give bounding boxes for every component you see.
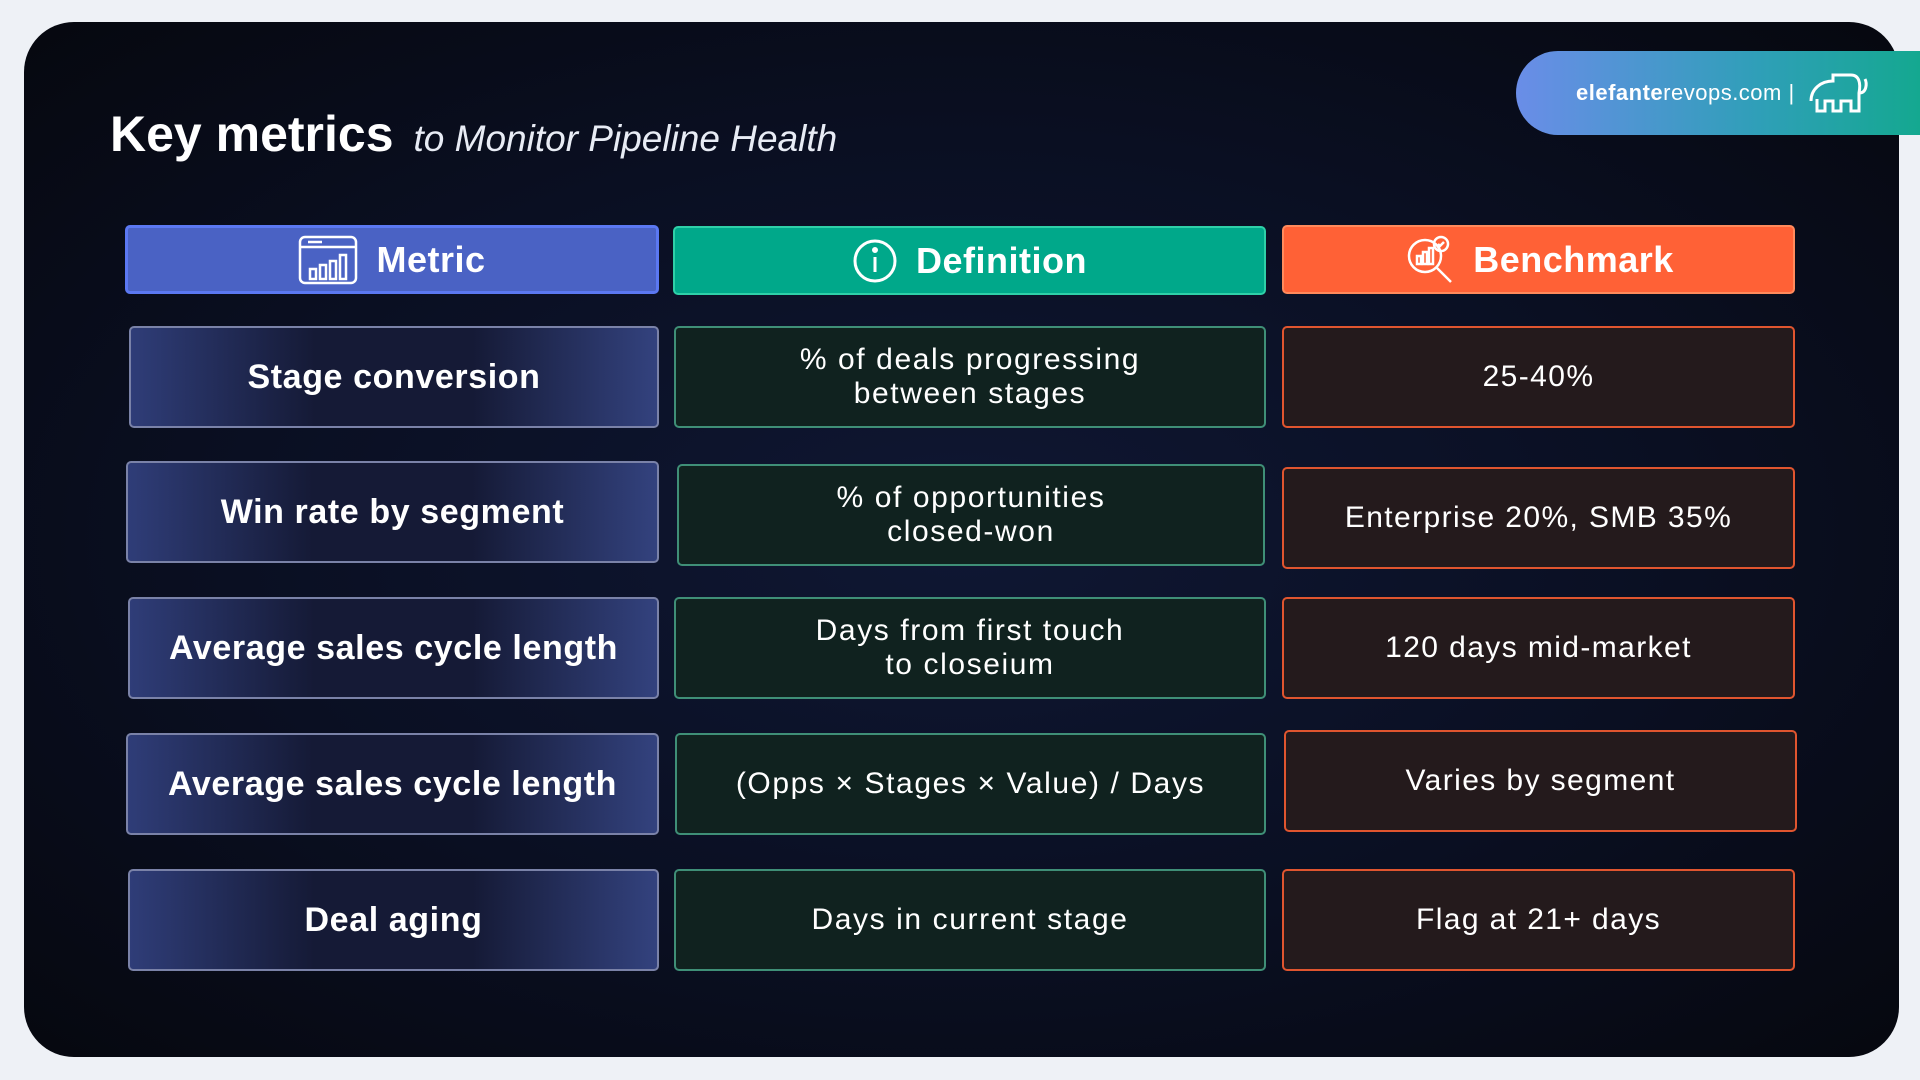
row 1 definition: % of deals progressing (800, 343, 1140, 376)
row 4 definition: (Opps × Stages × Value) / Days (736, 767, 1205, 800)
row 2 definition: % of opportunities (837, 481, 1105, 514)
row 2 metric: Win rate by segment (221, 492, 564, 530)
row 4 benchmark: Varies by segment (1405, 764, 1676, 797)
row 3 benchmark (1282, 597, 1795, 699)
row 2 definition: closed-won (887, 515, 1055, 548)
row 5 definition (674, 869, 1266, 971)
row 2 benchmark (1282, 467, 1795, 569)
row 5 metric: Deal aging (305, 900, 482, 938)
row 4 definition (675, 733, 1266, 835)
header: Benchmark (1282, 225, 1795, 294)
header: Definition: Definition (916, 240, 1087, 280)
row 3 metric: Average sales cycle length (169, 628, 618, 666)
icon: chart window (298, 236, 358, 284)
header: Benchmark: Benchmark (1473, 238, 1674, 280)
row 1 metric (129, 326, 659, 428)
row 3 definition: to closeium (885, 648, 1055, 681)
row 3 definition: Days from first touch (816, 614, 1124, 647)
icon: magnifier chart (1408, 236, 1452, 283)
header: Definition (673, 226, 1266, 295)
row 3 definition (674, 597, 1266, 699)
badge: elefanterevops (1516, 51, 1920, 135)
icon: elephant (1810, 74, 1868, 112)
row 3 benchmark: 120 days mid-market (1385, 631, 1692, 664)
row 1 benchmark (1282, 326, 1795, 428)
row 3 metric (128, 597, 659, 699)
header: Metric (125, 225, 659, 294)
row 4 metric: Average sales cycle length (168, 764, 617, 802)
row 5 benchmark (1282, 869, 1795, 971)
row 5 metric (128, 869, 659, 971)
badge: elefanterevops: elefanterevops.com | (1576, 80, 1795, 105)
row 1 benchmark: 25-40% (1483, 360, 1594, 393)
title: Key metrics to Monitor Pipeline Health (110, 106, 837, 162)
row 5 benchmark: Flag at 21+ days (1416, 903, 1661, 936)
row 4 benchmark (1284, 730, 1797, 832)
row 2 definition (677, 464, 1265, 566)
row 5 definition: Days in current stage (811, 903, 1129, 936)
row 4 metric (126, 733, 659, 835)
header: Metric: Metric (376, 238, 486, 280)
row 2 metric (126, 461, 659, 563)
row 1 metric: Stage conversion (247, 358, 541, 396)
row 1 definition (674, 326, 1266, 428)
row 1 definition: between stages (854, 377, 1086, 410)
icon: info (854, 240, 896, 282)
row 2 benchmark: Enterprise 20%, SMB 35% (1345, 501, 1732, 534)
